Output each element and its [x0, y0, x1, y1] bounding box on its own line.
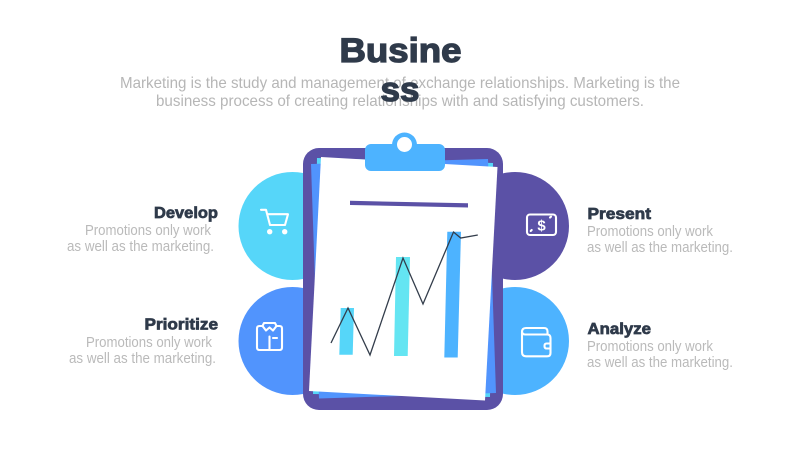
- text block: analyze: Analyze: [588, 321, 651, 338]
- icon: money note: [527, 214, 556, 235]
- text block: develop: Develop: [154, 205, 218, 222]
- title: ss: [380, 71, 420, 109]
- white sheet: [309, 157, 498, 400]
- clipboard illustration: [303, 132, 503, 410]
- circle: develop: [238, 172, 346, 280]
- blue sheet: [311, 159, 496, 398]
- clip: [365, 132, 445, 171]
- text block: present: Promotions only work: [587, 224, 714, 240]
- intro text: business process of creating relationships with and satisfying customers.: [156, 93, 644, 110]
- icon: wallet: [522, 328, 550, 356]
- intro text: [120, 75, 680, 110]
- bar chart: [339, 232, 461, 358]
- text block: prioritize: [69, 316, 218, 367]
- text block: prioritize: as well as the marketing.: [69, 351, 216, 367]
- text block: analyze: as well as the marketing.: [587, 355, 733, 371]
- icon: shopping cart: [261, 210, 288, 234]
- text block: develop: [67, 205, 218, 255]
- line chart: [331, 232, 478, 355]
- text block: present: [587, 206, 733, 256]
- icon: money note: $: [537, 218, 546, 234]
- chart heading bar: [350, 201, 468, 208]
- title: Busine: [340, 32, 462, 70]
- text block: present: as well as the marketing.: [587, 240, 733, 256]
- text block: develop: as well as the marketing.: [67, 239, 214, 255]
- cyan sheet: [313, 158, 493, 397]
- circle: prioritize: [238, 287, 346, 395]
- title: [340, 32, 462, 109]
- circle: present: [461, 172, 569, 280]
- text block: present: Present: [588, 206, 651, 223]
- text block: prioritize: Promotions only work: [86, 335, 213, 351]
- circle: analyze: [461, 287, 569, 395]
- clipboard board: [303, 148, 503, 410]
- text block: analyze: [587, 321, 733, 371]
- text block: develop: Promotions only work: [85, 223, 212, 239]
- icon: shirt: [257, 323, 282, 350]
- text block: analyze: Promotions only work: [587, 339, 714, 355]
- text block: prioritize: Prioritize: [144, 316, 218, 334]
- intro text: Marketing is the study and management of exchange relationships. Marketing is the: [120, 75, 680, 92]
